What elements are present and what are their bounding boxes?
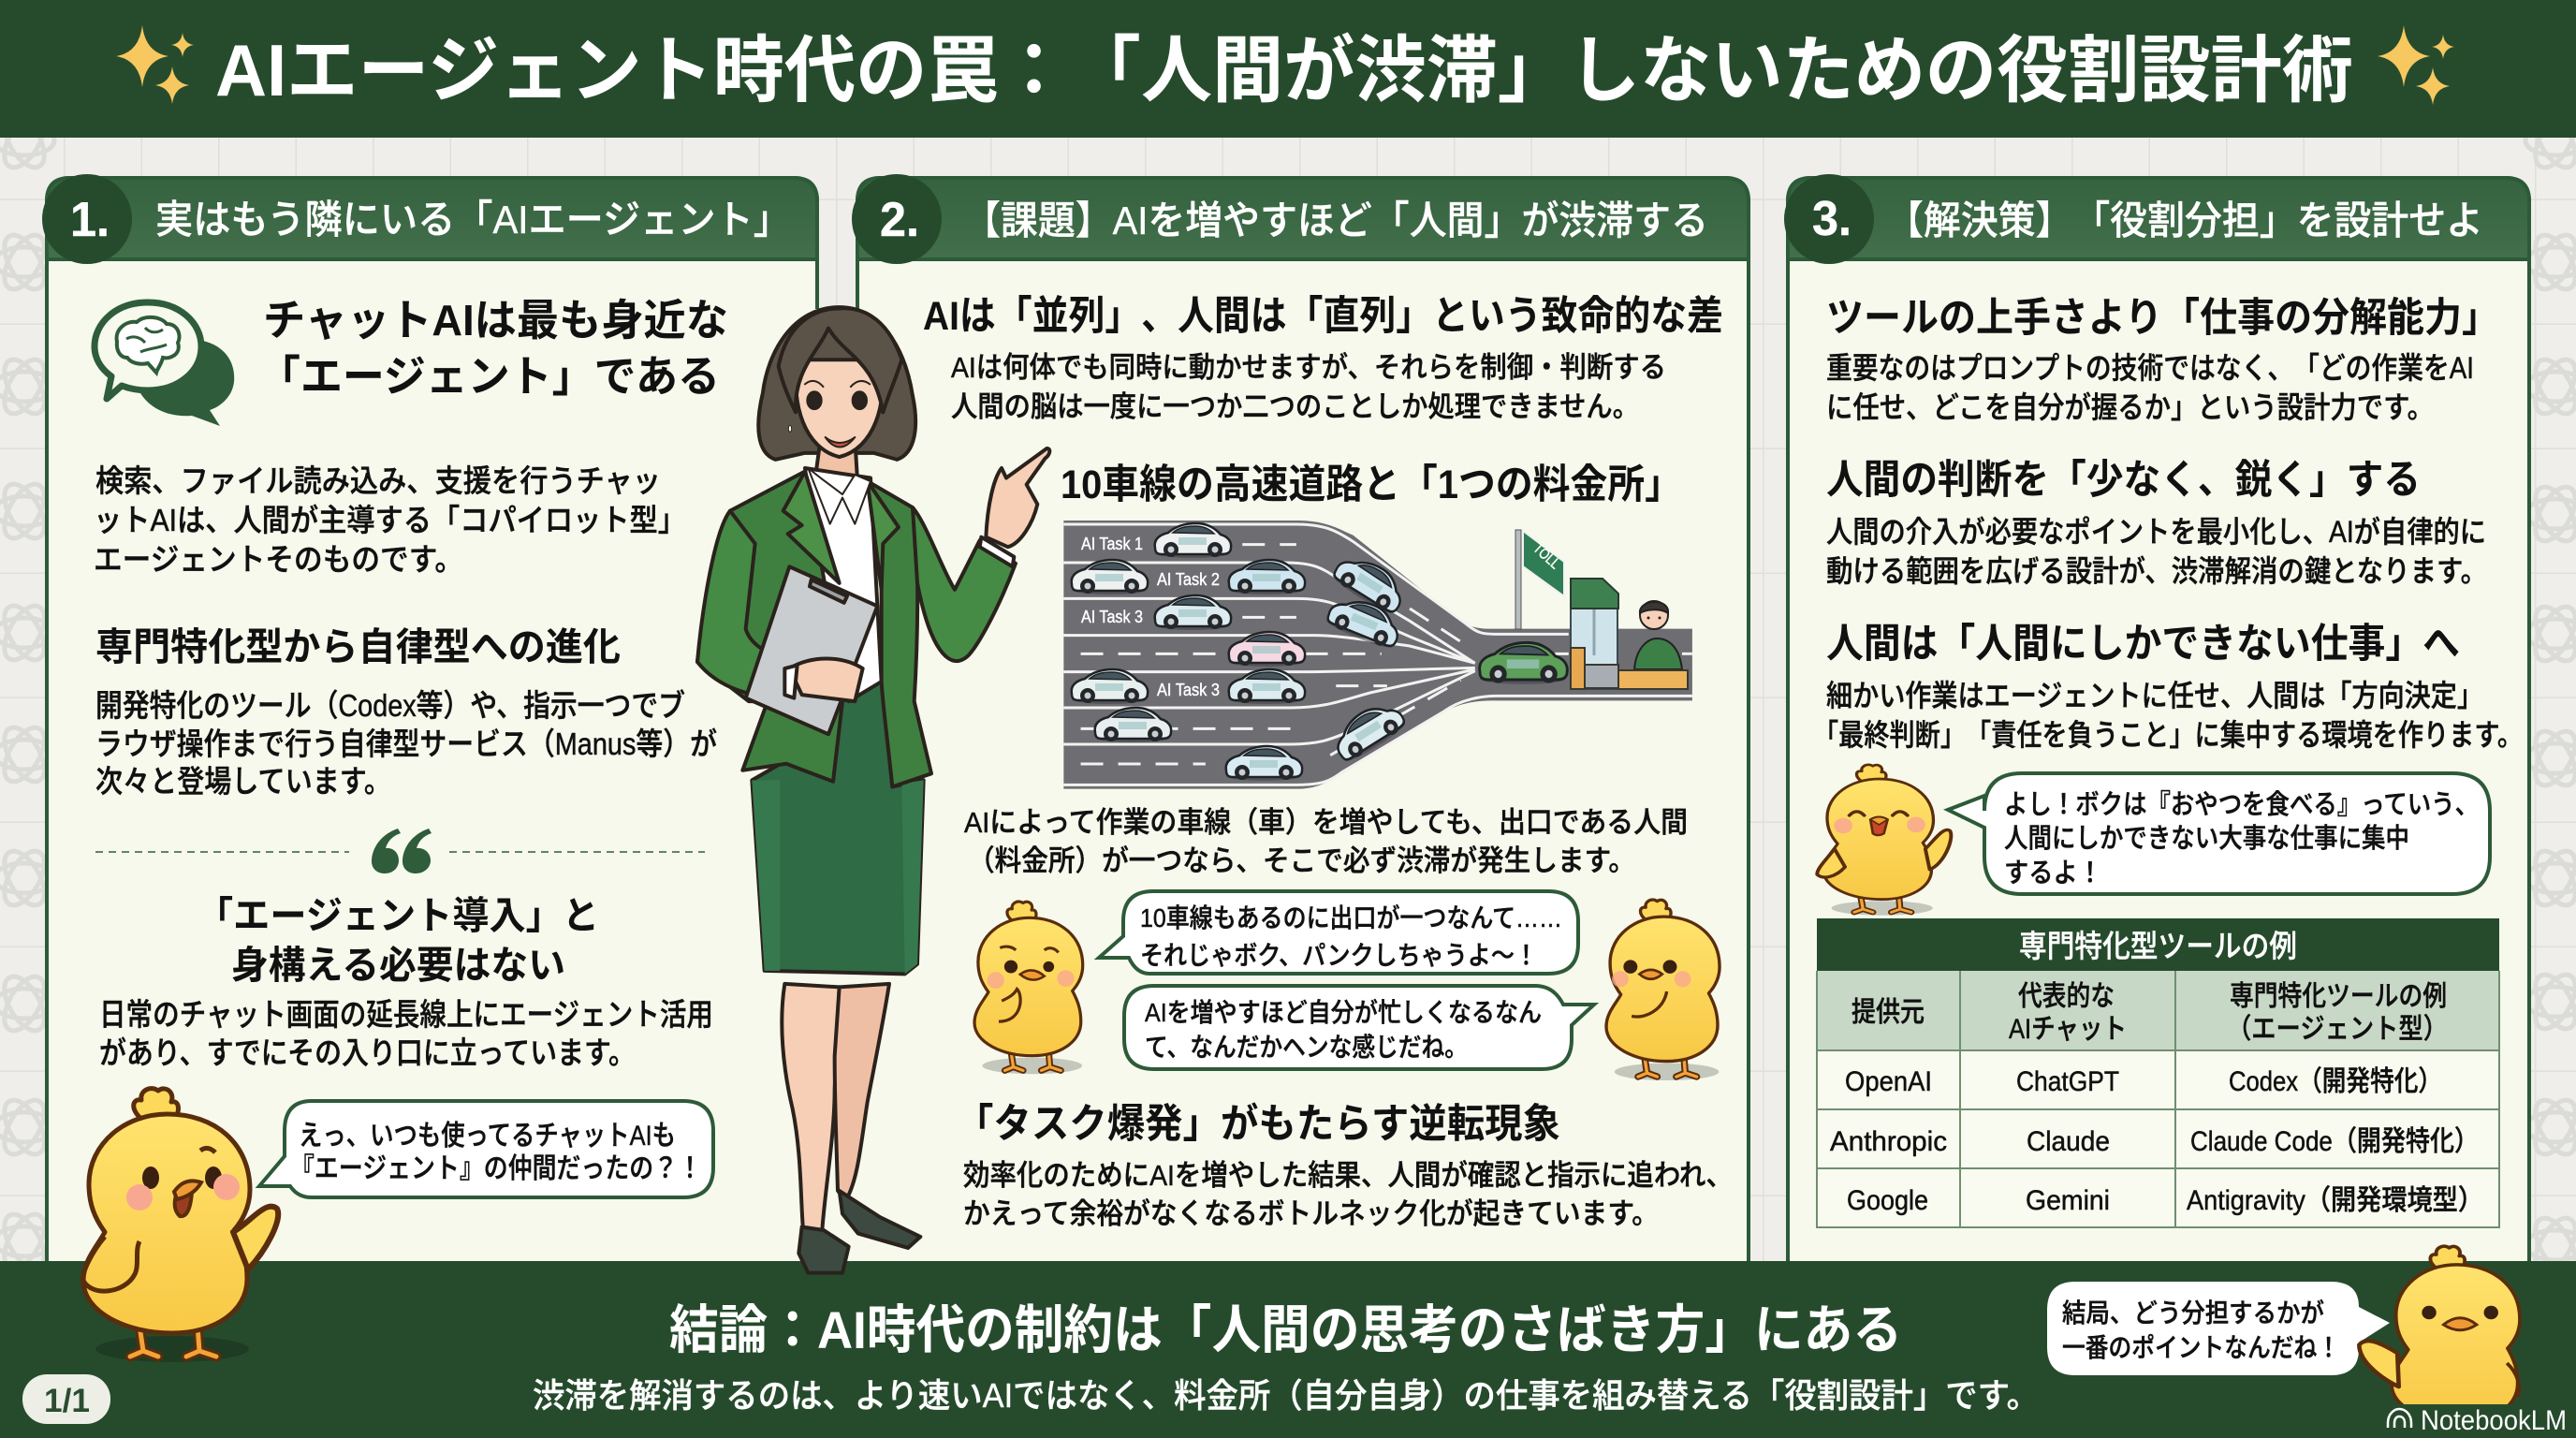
section: human-only work: 人間は「人間にしかできない仕事」へ	[1826, 622, 2460, 667]
table: specialized tools: AIチャット	[2009, 1014, 2127, 1045]
pointing hand	[986, 448, 1049, 547]
left sleeve	[697, 511, 793, 697]
table: specialized tools: Claude Code（開発特化）	[2190, 1126, 2479, 1157]
footer band	[0, 1261, 2576, 1438]
toll sign	[1515, 530, 1564, 629]
table: specialized tools	[1817, 918, 2499, 1227]
lane labels	[1081, 535, 1220, 699]
heading: chat AI	[258, 296, 728, 401]
speech bubble: chick puzzled: AIを増やすほど自分が忙しくなるなん	[1145, 998, 1542, 1027]
lane labels: AI Task 1	[1081, 535, 1143, 553]
icon: right sparkles	[2378, 25, 2454, 105]
title text: AIエージェント時代の罠：「人間が渋滞」しないための役割設計術	[215, 29, 2353, 111]
body: already at entrance	[99, 997, 713, 1070]
shirt	[805, 468, 882, 701]
right sleeve	[913, 507, 1016, 661]
body: parallel vs serial	[951, 351, 1666, 423]
section: human-only work	[1813, 622, 2523, 752]
table: specialized tools: ChatGPT	[2016, 1066, 2119, 1097]
chick: worried, panel 2 left	[974, 902, 1083, 1074]
body: copilot	[94, 463, 686, 577]
speech bubble: chick happy: するよ！	[2004, 858, 2102, 888]
page number pill: 1/1	[44, 1383, 90, 1419]
table: specialized tools: 提供元	[1852, 997, 1925, 1028]
icon: quote mark	[372, 829, 432, 873]
panel 3 header: 3.	[1812, 192, 1852, 246]
speech bubble: footer chick	[2047, 1282, 2390, 1375]
table: specialized tools: Anthropic	[1830, 1126, 1947, 1157]
table: specialized tools: Claude	[2027, 1126, 2110, 1157]
lane labels: AI Task 3	[1081, 608, 1143, 626]
hair back	[758, 307, 915, 460]
section: sharp judgement: 人間の介入が必要なポイントを最小化し、AIが自律的に	[1826, 515, 2486, 549]
conclusion heading: 結論：AI時代の制約は「人間の思考のさばき方」にある	[669, 1300, 1902, 1359]
panel 1 header: 1.	[70, 193, 110, 247]
heading: parallel vs serial: AIは「並列」、人間は「直列」という致命的な差	[923, 294, 1723, 339]
speech bubble: footer chick: 一番のポイントなんだね！	[2062, 1333, 2340, 1362]
icon: left sparkles	[116, 25, 194, 104]
speech bubble: chick worried	[1099, 891, 1578, 974]
panel 2 header: 【課題】AIを増やすほど「人間」が渋滞する	[963, 198, 1708, 242]
heading: evolution: 専門特化型から自律型への進化	[95, 625, 621, 668]
mouth	[826, 437, 855, 448]
speech bubble: chick 1: えっ、いつも使ってるチャットAIも	[299, 1121, 676, 1152]
table: specialized tools: 専門特化型ツールの例	[2019, 929, 2297, 963]
panel 1 header	[42, 174, 817, 264]
speech bubble: chick 1	[259, 1101, 713, 1197]
body: copilot: ットAIは、人間が主導する「コパイロット型」	[94, 503, 686, 537]
panel 2 header	[852, 174, 1749, 264]
lane labels: AI Task 3	[1157, 681, 1220, 699]
right lapel	[868, 481, 899, 590]
body: copilot: 検索、ファイル読み込み、支援を行うチャッ	[95, 463, 661, 498]
heading: no need to brace	[197, 894, 599, 987]
speech bubble: chick happy: よし！ボクは『おやつを食べる』っていう、	[2004, 789, 2479, 820]
left leg	[782, 984, 840, 1234]
toll booth with attendant	[1571, 579, 1688, 689]
section: decomposition: 重要なのはプロンプトの技術ではなく、「どの作業をAI	[1826, 351, 2474, 385]
body: jam explanation: （料金所）が一つなら、そこで必ず渋滞が発生します。	[968, 844, 1635, 877]
left lapel	[783, 472, 840, 583]
body: parallel vs serial: AIは何体でも同時に動かせますが、それらを制御・判断する	[951, 351, 1666, 384]
title banner	[0, 0, 2576, 138]
body: task explosion: かえって余裕がなくなるボトルネック化が起きています。	[963, 1197, 1659, 1230]
cover: panels merge behind presenter	[815, 309, 859, 1261]
holding hand	[789, 659, 863, 701]
speech bubble: chick happy	[1948, 773, 2490, 894]
left shoe	[798, 1227, 849, 1273]
section: sharp judgement	[1826, 458, 2487, 588]
body: jam explanation: AIによって作業の車線（車）を増やしても、出口である人間	[964, 806, 1688, 839]
body: evolution: 開発特化のツール（Codex等）や、指示一つでブ	[95, 688, 685, 723]
table: specialized tools: Gemini	[2026, 1185, 2110, 1216]
body: task explosion: 効率化のためにAIを増やした結果、人間が確認と指示に追われ、	[963, 1159, 1733, 1192]
speech bubble: chick puzzled: て、なんだかヘンな感じだね。	[1145, 1033, 1468, 1062]
panel 3 header: 【解決策】「役割分担」を設計せよ	[1886, 198, 2483, 242]
panel 2	[852, 174, 1749, 1264]
chick: puzzled, panel 2 right	[1606, 900, 1720, 1080]
heading: chat AI: チャットAIは最も身近な	[263, 296, 728, 345]
table: specialized tools: Antigravity（開発環境型）	[2187, 1185, 2483, 1216]
panel 1 header: 実はもう隣にいる「AIエージェント」	[155, 198, 791, 242]
icon: chat bubbles with brain	[95, 302, 234, 426]
speech bubble: chick puzzled	[1124, 986, 1594, 1069]
toll sign: TOLL	[1530, 540, 1563, 572]
conclusion subtext: 渋滞を解消するのは、より速いAIではなく、料金所（自分自身）の仕事を組み替える「役割設計」です。	[533, 1376, 2039, 1415]
speech bubble: footer chick: 結局、どう分担するかが	[2062, 1299, 2324, 1328]
neck	[814, 438, 858, 524]
table: specialized tools: 代表的な	[2018, 981, 2115, 1012]
body: copilot: エージェントそのものです。	[94, 542, 463, 577]
body: evolution: ラウザ操作まで行う自律型サービス（Manus等）が	[95, 726, 717, 761]
lane labels: AI Task 2	[1157, 570, 1220, 589]
right shoe	[840, 1191, 920, 1248]
diagram: highway merging into one toll booth	[1063, 521, 1692, 789]
presenter: woman in green suit	[697, 307, 1049, 1273]
section: sharp judgement: 人間の判断を「少なく、鋭く」する	[1826, 458, 2421, 503]
panel 1	[42, 174, 817, 1264]
cars queueing	[1072, 523, 1567, 781]
table: specialized tools: 専門特化ツールの例	[2230, 981, 2447, 1012]
clipboard	[746, 566, 877, 734]
watermark: NotebookLM: NotebookLM	[2421, 1405, 2567, 1436]
body: already at entrance: があり、すでにその入り口に立っています。	[99, 1035, 636, 1070]
body: parallel vs serial: 人間の脳は一度に一つか二つのことしか処理できません。	[951, 390, 1639, 423]
section: human-only work: 細かい作業はエージェントに任せ、人間は「方向決定」	[1826, 679, 2483, 712]
table: specialized tools: Codex（開発特化）	[2229, 1066, 2442, 1097]
heading: task explosion: 「タスク爆発」がもたらす逆転現象	[956, 1102, 1560, 1147]
speech bubble: chick happy: 人間にしかできない大事な仕事に集中	[2004, 823, 2409, 854]
jacket right body	[868, 481, 931, 786]
skirt	[752, 682, 924, 974]
speech bubble: chick worried: 10車線もあるのに出口が一つなんて……	[1140, 903, 1562, 932]
chick: happy, panel 3	[1817, 765, 1951, 916]
panel 3 header	[1784, 174, 2529, 264]
collar	[808, 468, 871, 524]
speech bubble: chick 1: 『エージェント』の仲間だったの？！	[290, 1153, 702, 1184]
section: decomposition: ツールの上手さより「仕事の分解能力」	[1826, 296, 2499, 341]
table: specialized tools: OpenAI	[1845, 1066, 1932, 1097]
chick: footer mascot	[2359, 1246, 2520, 1438]
heading: chat AI: 「エージェント」である	[258, 352, 720, 401]
speech bubble: chick worried: それじゃボク、パンクしちゃうよ～！	[1140, 941, 1538, 970]
jacket left body	[697, 472, 842, 782]
body: evolution	[95, 688, 717, 799]
fringe	[779, 308, 901, 412]
section: sharp judgement: 動ける範囲を広げる設計が、渋滞解消の鍵となります。	[1826, 554, 2487, 588]
chick: panel 1 mascot	[83, 1089, 278, 1362]
face	[796, 360, 883, 457]
page number pill	[22, 1374, 110, 1424]
eyes and brows	[808, 392, 821, 408]
section: decomposition	[1826, 296, 2499, 424]
body: evolution: 次々と登場しています。	[95, 764, 391, 799]
body: task explosion	[963, 1159, 1733, 1230]
body: already at entrance: 日常のチャット画面の延長線上にエージェント活用	[99, 997, 713, 1032]
panel 3	[1784, 174, 2529, 1264]
heading: no need to brace: 「エージェント導入」と	[197, 894, 599, 937]
table: specialized tools: Google	[1847, 1185, 1928, 1216]
section: decomposition: に任せ、どこを自分が握るか」という設計力です。	[1826, 390, 2434, 424]
panel 2 header: 2.	[880, 193, 919, 247]
heading: no need to brace: 身構える必要はない	[231, 944, 565, 987]
heading: highway: 10車線の高速道路と「1つの料金所」	[1061, 462, 1682, 507]
right leg	[835, 984, 889, 1200]
table: specialized tools: （エージェント型）	[2227, 1014, 2448, 1045]
body: jam explanation	[964, 806, 1688, 877]
skirt highlights	[752, 780, 924, 974]
